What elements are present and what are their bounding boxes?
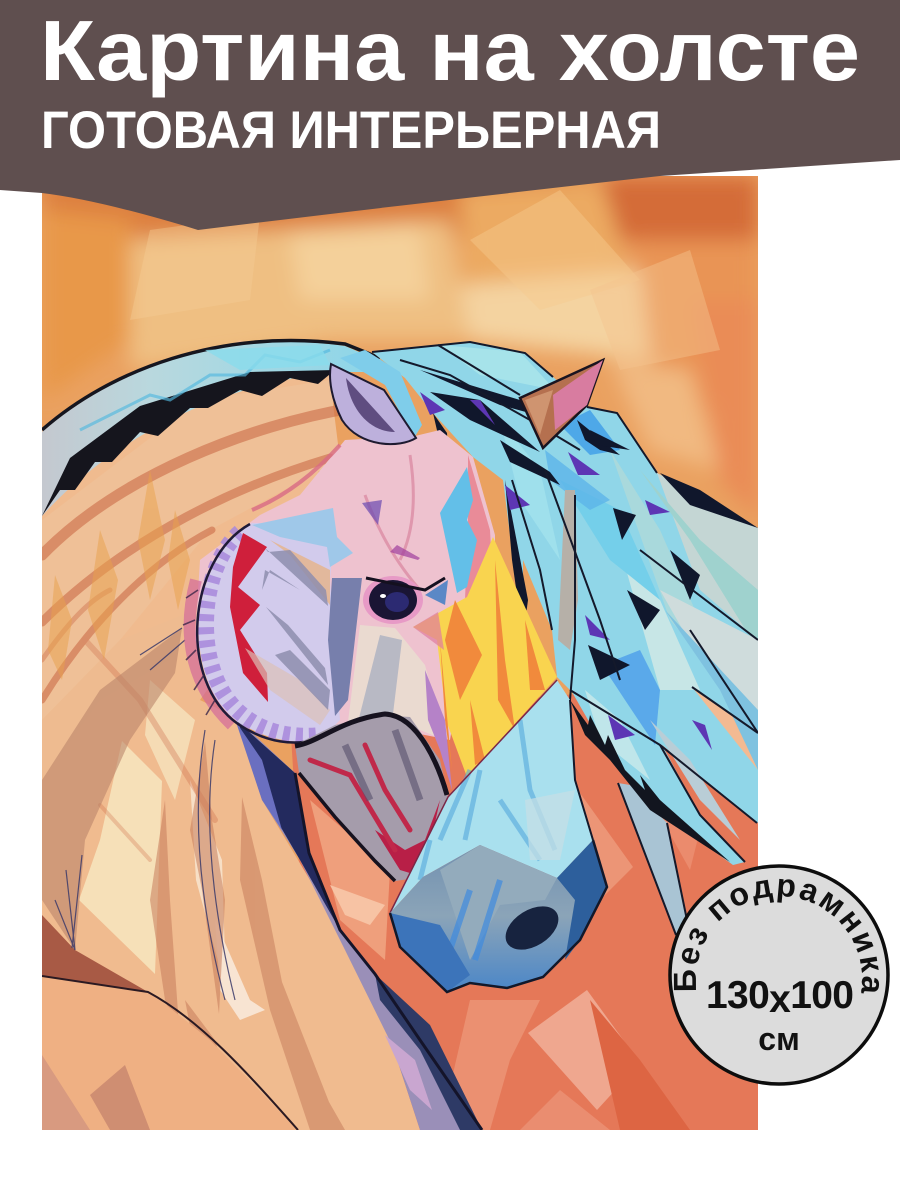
muzzle facets — [420, 720, 555, 880]
long neck streaks — [150, 741, 345, 1130]
painting background washes — [42, 176, 758, 1130]
jaw outline — [197, 524, 315, 743]
left ear — [330, 364, 416, 444]
muzzle bridge beige — [348, 625, 434, 736]
red jaw marking — [230, 533, 268, 702]
cream panes — [79, 741, 162, 974]
shoulder dark wedge — [42, 915, 148, 992]
nose — [390, 840, 607, 992]
narrow lower strand — [618, 783, 690, 935]
badge size: 130 — [706, 974, 770, 1017]
blue forehead marking — [252, 508, 353, 567]
jaw pink fringe — [190, 580, 232, 725]
mane over left ear — [340, 350, 422, 438]
right ear — [520, 360, 603, 448]
size badge — [668, 864, 890, 1086]
lower body — [42, 976, 298, 1130]
tan jaw bands — [270, 540, 330, 605]
body outline — [42, 976, 298, 1130]
orange vertical wash marks — [48, 470, 190, 680]
lilac strip beside jaw — [425, 670, 452, 790]
mane ink lines — [372, 342, 758, 862]
jaw red markings — [310, 745, 410, 850]
badge curved label: Без подрамника — [674, 878, 880, 994]
hair fine lines — [55, 628, 235, 1000]
blue forehead shard — [440, 467, 477, 593]
mane light and grey shards — [440, 345, 758, 840]
title: Картина на холсте — [40, 4, 860, 99]
badge unit: см — [758, 1021, 800, 1057]
painting: horse on canvas — [42, 176, 758, 1130]
mane stripes on neck — [42, 408, 352, 860]
badge size: x — [769, 978, 791, 1021]
dark neck stripe — [235, 717, 482, 1130]
horse head — [183, 430, 557, 881]
right mane — [372, 342, 758, 935]
crimson under jaw — [340, 800, 440, 877]
mane dark darts — [420, 370, 758, 680]
head pink base — [195, 430, 495, 745]
yellow orange panel — [413, 537, 557, 777]
pink forehead band — [465, 455, 492, 600]
muzzle — [390, 680, 607, 992]
forehead ridge marks — [365, 455, 420, 590]
eye — [363, 576, 448, 624]
badge size: 100 — [790, 974, 854, 1017]
cheek grey strip — [328, 578, 362, 716]
jaw hair hatching — [183, 590, 215, 715]
top mane band — [42, 341, 405, 516]
nostril — [498, 897, 566, 959]
body and neck — [42, 340, 420, 1130]
top banner — [0, 0, 900, 230]
jaw disc — [199, 523, 340, 741]
muzzle bridge grey — [358, 635, 402, 722]
serrated mane edge — [570, 700, 730, 862]
lower jaw — [295, 715, 448, 881]
grey chevrons — [262, 548, 330, 710]
translucent hair band — [42, 628, 182, 950]
mane purple accents — [420, 392, 712, 750]
jaw purple hatching — [206, 532, 320, 736]
lower salmon field — [290, 690, 758, 1130]
upper neck wash — [318, 404, 338, 472]
subtitle: ГОТОВАЯ ИНТЕРЬЕРНАЯ — [41, 101, 661, 160]
